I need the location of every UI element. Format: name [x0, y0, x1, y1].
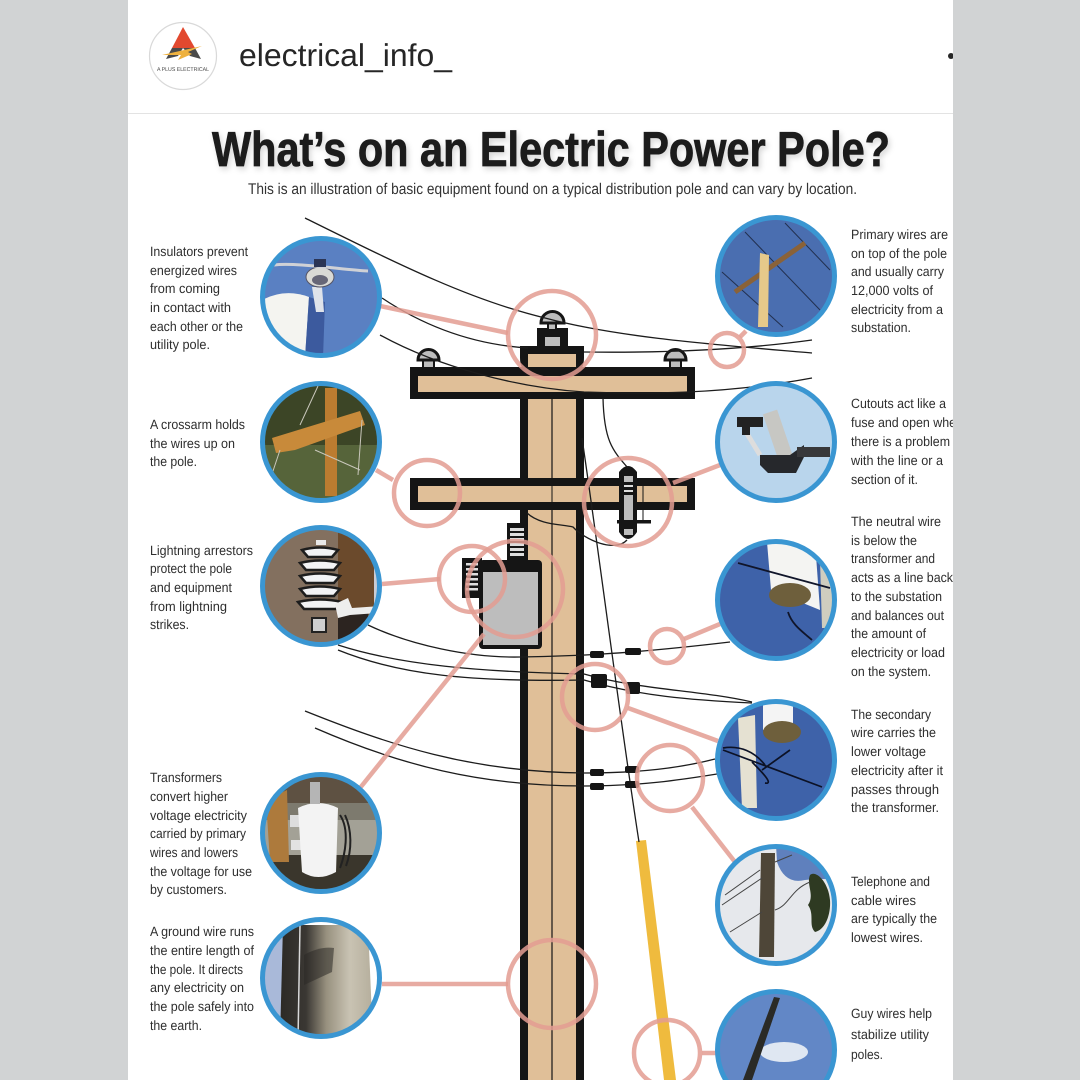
left insulator: [418, 350, 439, 368]
ring: secondary wire photo: [718, 702, 834, 818]
text: neutral wire: to the substation: [851, 589, 942, 604]
text: neutral wire: electricity or load: [851, 645, 945, 660]
text: crossarm: [150, 417, 245, 469]
text: insulators: from coming: [150, 281, 220, 296]
logo: A Plus Electrical: A PLUS ELECTRICAL: [157, 67, 209, 73]
text: lightning arrestors: and equipment: [150, 580, 232, 595]
ring: crossarm photo: [262, 384, 380, 500]
text: lightning arrestors: protect the pole: [150, 561, 232, 576]
photo: ground wire: [265, 925, 372, 1034]
account name: electrical_info_: [239, 37, 452, 73]
text: neutral wire: The neutral wire: [851, 514, 941, 529]
text: transformers: [149, 770, 252, 897]
text: ground wire: A ground wire runs: [150, 924, 254, 939]
ring: telephone wires photo: [718, 846, 834, 964]
text: insulators: utility pole.: [150, 337, 210, 352]
upper crossarm: [410, 367, 695, 399]
text: insulators: Insulators prevent: [150, 244, 248, 259]
ring: guy wire photo: [718, 992, 834, 1080]
text: neutral wire: acts as a line back: [851, 570, 953, 585]
text: secondary wire: wire carries the: [850, 725, 936, 740]
text: telephone and cable wires: are typically the: [851, 911, 937, 926]
text: telephone and cable wires: [851, 874, 937, 945]
text: telephone and cable wires: lowest wires.: [851, 930, 923, 945]
text: insulators: energized wires: [150, 263, 237, 278]
text: transformers: Transformers: [150, 770, 222, 785]
callout: ground wire: [382, 940, 596, 1028]
text: lightning arrestors: [150, 543, 253, 632]
text: lightning arrestors: Lightning arrestors: [150, 543, 253, 558]
text: transformers: convert higher: [150, 789, 228, 804]
ring: insulator photo: [262, 238, 380, 356]
text: cutouts: [850, 396, 963, 487]
text: ground wire: the pole. It directs: [150, 962, 243, 977]
lower crossarm: [410, 478, 695, 510]
text: lightning arrestors: strikes.: [150, 617, 189, 632]
text: crossarm: the pole.: [150, 454, 197, 469]
text: crossarm: A crossarm holds: [150, 417, 245, 432]
callout rings and leaders: [360, 291, 746, 1080]
text: primary wires: 12,000 volts of: [851, 283, 933, 298]
text: neutral wire: the amount of: [851, 626, 926, 641]
photo: telephone wires: [720, 849, 832, 961]
callout: neutral wire: [650, 624, 720, 663]
text: cutouts: section of it.: [851, 472, 918, 487]
header bar: [128, 0, 954, 114]
text: ground wire: any electricity on: [150, 980, 244, 995]
text: primary wires: substation.: [851, 320, 911, 335]
text: insulators: each other or the: [150, 319, 243, 334]
text: secondary wire: electricity after it: [851, 763, 943, 778]
text: cutouts: with the line or a: [850, 453, 943, 468]
text: cutouts: fuse and open when: [851, 415, 963, 430]
photo: neutral wire: [720, 544, 832, 656]
text: cutouts: there is a problem: [851, 434, 950, 449]
callout: primary wires: [710, 331, 746, 367]
wire connectors: [590, 648, 641, 790]
text: secondary wire: the transformer.: [851, 800, 939, 815]
photo: crossarm: [265, 386, 377, 498]
text: ground wire: the pole safely into: [150, 999, 254, 1014]
photo: transformer: [265, 777, 377, 889]
callout: cutouts: [584, 458, 720, 546]
text: insulators: [150, 244, 248, 352]
left gray margin: [0, 0, 128, 1080]
text: primary wires: electricity from a: [851, 302, 943, 317]
text: transformers: the voltage for use: [150, 864, 252, 879]
text: neutral wire: is below the: [851, 533, 917, 548]
text: primary wires: [851, 227, 948, 335]
text: secondary wire: passes through: [851, 782, 939, 797]
photo: insulator: [265, 241, 377, 353]
callout: secondary wire: [562, 664, 718, 741]
text: crossarm: the wires up on: [150, 436, 235, 451]
ring: primary wires photo: [718, 218, 834, 334]
text: ground wire: the earth.: [150, 1018, 202, 1033]
text: primary wires: on top of the pole: [851, 246, 947, 261]
ring: ground wire photo: [262, 920, 380, 1036]
yellow guy wire guard: [636, 840, 676, 1080]
text: ground wire: [150, 924, 254, 1033]
text: secondary wire: lower voltage: [851, 744, 926, 759]
photo: guy wire: [720, 994, 832, 1080]
text: secondary wire: The secondary: [851, 707, 931, 722]
text: ground wire: the entire length of: [150, 943, 254, 958]
pole body: [520, 398, 584, 1080]
pole top cap: [520, 312, 584, 380]
text: neutral wire: and balances out: [851, 608, 944, 623]
text: transformers: wires and lowers: [149, 845, 238, 860]
photo: cutout: [720, 386, 832, 498]
text: insulators: in contact with: [150, 300, 231, 315]
text: primary wires: Primary wires are: [851, 227, 948, 242]
text: neutral wire: transformer and: [851, 551, 935, 566]
right gray margin: [953, 0, 1080, 1080]
logo: A Plus Electrical: [150, 22, 216, 90]
lightning arrestor: [462, 558, 482, 598]
photo: lightning arrestor: [265, 530, 377, 642]
callout: crossarm: [376, 460, 460, 526]
pole illustration: [305, 218, 812, 1080]
ring: lightning arrestor photo: [262, 528, 380, 644]
ring: transformer photo: [262, 774, 380, 892]
text: telephone and cable wires: cable wires: [851, 893, 916, 908]
text: primary wires: and usually carry: [851, 264, 944, 279]
text: telephone and cable wires: Telephone and: [851, 874, 930, 889]
wires: [305, 218, 812, 842]
text: secondary wire: [850, 707, 943, 815]
menu dot: [948, 53, 954, 59]
text: lightning arrestors: from lightning: [150, 599, 227, 614]
right insulator: [665, 350, 686, 368]
callout: guy wires: [634, 1020, 716, 1080]
text: guy wires: Guy wires help: [851, 1006, 932, 1021]
subtitle: This is an illustration of basic equipment found on a typical distribution pole and can vary by location.: [248, 181, 857, 198]
transformer: [479, 523, 542, 649]
cutout: [617, 466, 651, 539]
callout: lightning arrestor: [382, 546, 505, 612]
text: guy wires: [851, 1006, 932, 1062]
text: transformers: voltage electricity: [150, 808, 247, 823]
ring: cutout photo: [718, 384, 834, 500]
photo: primary wires: [720, 220, 832, 332]
ring: neutral wire photo: [718, 542, 834, 658]
text: neutral wire: [851, 514, 953, 679]
white post panel: [128, 0, 953, 1080]
callout: insulators: [380, 291, 596, 379]
text: neutral wire: on the system.: [851, 664, 931, 679]
text: cutouts: Cutouts act like a: [851, 396, 946, 411]
text: transformers: carried by primary: [150, 826, 246, 841]
callout: telephone wires: [637, 745, 735, 862]
text: guy wires: stabilize utility: [851, 1027, 929, 1042]
text: guy wires: poles.: [851, 1047, 883, 1062]
text: transformers: by customers.: [150, 882, 227, 897]
callout: transformer: [360, 541, 563, 788]
photo: secondary wire: [720, 704, 832, 816]
title: What’s on an Electric Power Pole?: [212, 123, 890, 177]
